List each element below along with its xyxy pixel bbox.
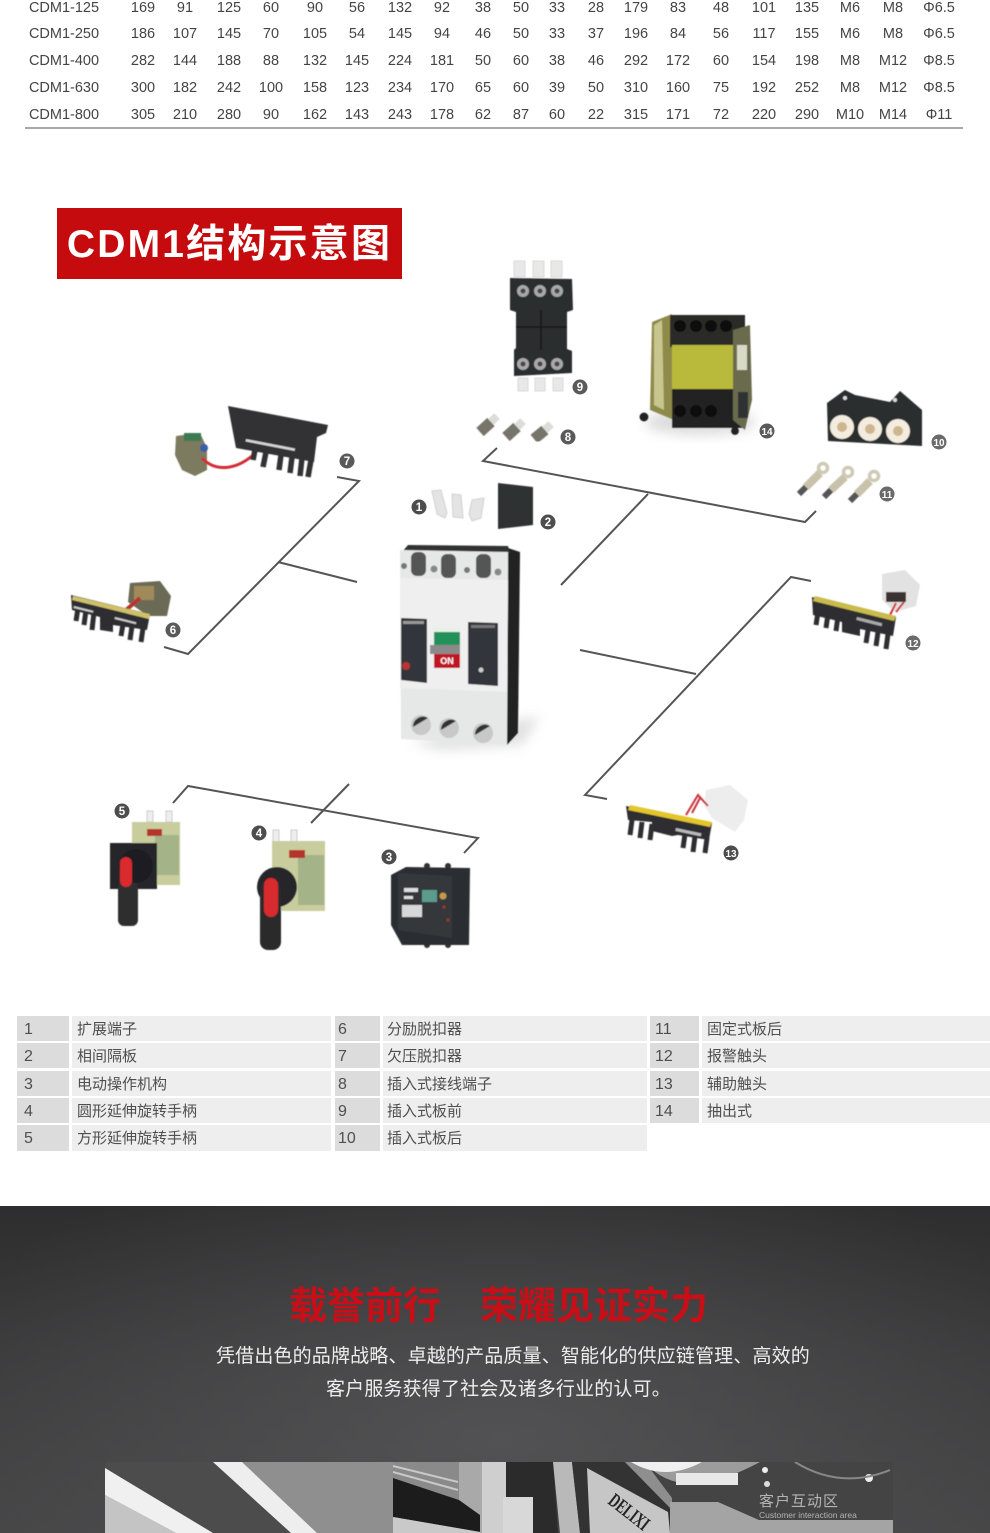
leader lines: left bracket	[164, 477, 359, 654]
row CDM1-630: M8	[840, 80, 860, 96]
row CDM1-630: 39	[549, 80, 565, 96]
parts legend table: 14	[655, 1103, 673, 1120]
product: main circuit breaker	[400, 545, 540, 750]
parts legend table: 插入式板前	[387, 1103, 462, 1120]
badge 7	[340, 454, 354, 468]
row CDM1-250: Φ6.5	[923, 26, 955, 42]
row CDM1-250: 107	[173, 26, 197, 42]
row CDM1-400: 60	[713, 53, 729, 69]
photo panel: customer interaction area	[503, 1462, 893, 1533]
row CDM1-400: 172	[666, 53, 690, 69]
row CDM1-400: 154	[752, 53, 776, 69]
product 2: phase barrier	[498, 483, 533, 529]
badge 6: 6	[170, 625, 176, 637]
row CDM1-630: 160	[666, 80, 690, 96]
dimension table	[25, 0, 963, 129]
row CDM1-630: 100	[259, 80, 283, 96]
badge 12	[906, 636, 920, 650]
row CDM1-630: CDM1-630	[29, 80, 99, 96]
row CDM1-800: 90	[263, 107, 279, 123]
row CDM1-400: 292	[624, 53, 648, 69]
row CDM1-125: 92	[434, 0, 450, 16]
row CDM1-125: 38	[475, 0, 491, 16]
section description: 客户服务获得了社会及诸多行业的认可。	[326, 1379, 671, 1400]
product 13: auxiliary contact	[626, 785, 748, 853]
row CDM1-125: 90	[307, 0, 323, 16]
badge 10	[932, 434, 946, 450]
row CDM1-250: 155	[795, 26, 819, 42]
parts legend table: 扩展端子	[77, 1021, 137, 1038]
parts legend table: 欠压脱扣器	[387, 1048, 462, 1065]
row CDM1-250: 145	[217, 26, 241, 42]
area sign english text: Customer interaction area	[759, 1510, 857, 1520]
row CDM1-800: 62	[475, 107, 491, 123]
row CDM1-400	[29, 53, 955, 69]
row CDM1-800: 290	[795, 107, 819, 123]
row CDM1-400: 144	[173, 53, 197, 69]
row CDM1-250	[29, 26, 955, 42]
parts legend table: 分励脱扣器	[387, 1021, 462, 1038]
row CDM1-400: 46	[588, 53, 604, 69]
badge 9	[572, 380, 588, 394]
row CDM1-630: 300	[131, 80, 155, 96]
badge 8	[560, 430, 576, 444]
badge 8: 8	[565, 432, 572, 444]
row CDM1-400: M8	[840, 53, 860, 69]
row CDM1-125: 169	[131, 0, 155, 16]
row CDM1-800: 162	[303, 107, 327, 123]
section title: 荣耀见证实力	[480, 1286, 708, 1328]
section title: 载誉前行	[289, 1286, 441, 1328]
badge 12: 12	[907, 639, 919, 650]
badge 7: 7	[344, 456, 350, 468]
row CDM1-250: 37	[588, 26, 604, 42]
parts legend table: 12	[655, 1048, 673, 1065]
row CDM1-630	[29, 80, 955, 96]
leader lines: bottom bracket	[173, 784, 478, 853]
row CDM1-630: M12	[879, 80, 907, 96]
parts legend table: 4	[24, 1103, 33, 1120]
row CDM1-400: M12	[879, 53, 907, 69]
row CDM1-800: 210	[173, 107, 197, 123]
area sign text: 客户互动区	[759, 1493, 839, 1510]
heading: CDM1 structure diagram	[57, 208, 402, 279]
row CDM1-800: 60	[549, 107, 565, 123]
row CDM1-400: 181	[430, 53, 454, 69]
row CDM1-800: 315	[624, 107, 648, 123]
row CDM1-400: 198	[795, 53, 819, 69]
row CDM1-630: Φ8.5	[923, 80, 955, 96]
row CDM1-125: 179	[624, 0, 648, 16]
row CDM1-400: 38	[549, 53, 565, 69]
row CDM1-400: 60	[513, 53, 529, 69]
badge 5: 5	[119, 806, 126, 818]
badge 14	[760, 424, 774, 438]
row CDM1-400: 132	[303, 53, 327, 69]
parts legend table: 插入式接线端子	[387, 1076, 492, 1093]
heading: CDM1 structure diagram: CDM1结构示意图	[67, 223, 392, 266]
row CDM1-400: 50	[475, 53, 491, 69]
parts legend table: 11	[655, 1021, 672, 1038]
leader lines: top bracket	[483, 448, 816, 585]
row CDM1-250: 84	[670, 26, 686, 42]
row CDM1-125: M8	[883, 0, 903, 16]
row CDM1-800	[29, 107, 952, 123]
row CDM1-250: M8	[883, 26, 903, 42]
row CDM1-125: 33	[549, 0, 565, 16]
parts legend table: 10	[338, 1130, 356, 1147]
row CDM1-250: M6	[840, 26, 860, 42]
section title	[289, 1286, 708, 1328]
row CDM1-800: CDM1-800	[29, 107, 99, 123]
parts legend table: 2	[24, 1048, 33, 1065]
parts legend table: 8	[338, 1076, 347, 1093]
row CDM1-125: M6	[840, 0, 860, 16]
badge 6	[166, 622, 180, 638]
product 11: fixed rear terminals	[799, 464, 878, 501]
row CDM1-250: 56	[713, 26, 729, 42]
row CDM1-800: 305	[131, 107, 155, 123]
row CDM1-250: 70	[263, 26, 279, 42]
parts legend table: 电动操作机构	[77, 1076, 167, 1093]
row CDM1-250: 46	[475, 26, 491, 42]
row CDM1-800: 280	[217, 107, 241, 123]
row CDM1-630: 50	[588, 80, 604, 96]
photo panel: architecture	[105, 1462, 393, 1533]
parts legend table: 5	[24, 1130, 33, 1147]
row CDM1-125	[29, 0, 955, 16]
row CDM1-125: 60	[263, 0, 279, 16]
row CDM1-125: 83	[670, 0, 686, 16]
section description	[216, 1346, 810, 1400]
row CDM1-250: 186	[131, 26, 155, 42]
parts legend table: 插入式板后	[387, 1130, 462, 1147]
row CDM1-125: 56	[349, 0, 365, 16]
row CDM1-800: M14	[879, 107, 907, 123]
row CDM1-125: Φ6.5	[923, 0, 955, 16]
row CDM1-630: 158	[303, 80, 327, 96]
product 14: draw-out mechanism	[640, 314, 755, 435]
row CDM1-400: 224	[388, 53, 412, 69]
row CDM1-800: 243	[388, 107, 412, 123]
row CDM1-630: 192	[752, 80, 776, 96]
row CDM1-125: 28	[588, 0, 604, 16]
product 8: plug-in terminals	[480, 416, 551, 439]
parts legend table: 固定式板后	[707, 1021, 782, 1038]
row CDM1-400: 145	[345, 53, 369, 69]
parts legend table: 圆形延伸旋转手柄	[77, 1103, 197, 1120]
parts legend table: 报警触头	[707, 1048, 767, 1065]
row CDM1-800: 178	[430, 107, 454, 123]
row CDM1-630: 75	[713, 80, 729, 96]
row CDM1-630: 65	[475, 80, 491, 96]
product 9: plug-in front plate	[510, 261, 573, 391]
product 4: round extended rotary handle	[257, 830, 325, 950]
row CDM1-250: 117	[752, 26, 776, 42]
row CDM1-250: 105	[303, 26, 327, 42]
badge 11	[880, 486, 894, 502]
row CDM1-800: 171	[666, 107, 690, 123]
row CDM1-250: 33	[549, 26, 565, 42]
dark honors section background	[0, 1206, 990, 1533]
parts legend table: 1	[24, 1021, 33, 1038]
row CDM1-630: 60	[513, 80, 529, 96]
row CDM1-630: 234	[388, 80, 412, 96]
badge 11: 11	[882, 490, 893, 501]
badge 1	[412, 500, 426, 514]
row CDM1-125: 50	[513, 0, 529, 16]
row CDM1-250: CDM1-250	[29, 26, 99, 42]
photo panel: building facade	[393, 1462, 506, 1533]
row CDM1-630: 310	[624, 80, 648, 96]
product 5: square extended rotary handle	[110, 811, 180, 926]
row CDM1-400: 282	[131, 53, 155, 69]
badge 14: 14	[761, 427, 773, 438]
badge 13: 13	[725, 849, 737, 860]
row CDM1-125: CDM1-125	[29, 0, 99, 16]
product 6: shunt release	[71, 581, 171, 642]
parts legend table: 方形延伸旋转手柄	[77, 1130, 197, 1147]
row CDM1-125: 132	[388, 0, 412, 16]
parts legend table: 9	[338, 1103, 347, 1120]
grayscale photo strip	[105, 1462, 893, 1533]
row CDM1-630: 182	[173, 80, 197, 96]
badge 5	[114, 804, 130, 818]
badge 9: 9	[577, 382, 583, 394]
row CDM1-125: 125	[217, 0, 241, 16]
badge 10: 10	[933, 438, 945, 449]
row CDM1-250: 54	[349, 26, 365, 42]
row CDM1-630: 252	[795, 80, 819, 96]
parts legend table: 7	[338, 1048, 347, 1065]
row CDM1-800: 87	[513, 107, 529, 123]
badge 4: 4	[256, 828, 263, 840]
badge 2	[540, 514, 556, 530]
parts legend table	[17, 1016, 990, 1151]
product 3: motor operator	[391, 863, 470, 948]
product 7: undervoltage release	[175, 406, 328, 477]
row CDM1-125: 101	[752, 0, 776, 16]
parts legend table: 3	[24, 1076, 33, 1093]
row CDM1-630: 170	[430, 80, 454, 96]
row CDM1-400: Φ8.5	[923, 53, 955, 69]
parts legend table: 13	[655, 1076, 673, 1093]
badge 4	[252, 826, 266, 840]
product 10: plug-in rear plate	[827, 390, 922, 446]
parts legend table: 6	[338, 1021, 347, 1038]
row CDM1-800: 220	[752, 107, 776, 123]
badge 2: 2	[545, 517, 551, 529]
row CDM1-800: Φ11	[926, 107, 952, 123]
row CDM1-125: 135	[795, 0, 819, 16]
exploded structure diagram	[70, 260, 946, 951]
leader lines: right bracket	[580, 577, 811, 799]
row CDM1-125: 48	[713, 0, 729, 16]
section description: 凭借出色的品牌战略、卓越的产品质量、智能化的供应链管理、高效的	[216, 1346, 810, 1367]
parts legend table: 抽出式	[707, 1103, 752, 1120]
row CDM1-250: 145	[388, 26, 412, 42]
badge 13	[724, 846, 738, 860]
row CDM1-800: 143	[345, 107, 369, 123]
row CDM1-800: 72	[713, 107, 729, 123]
number badges	[114, 380, 946, 864]
row CDM1-800: 22	[588, 107, 604, 123]
row CDM1-800: M10	[836, 107, 864, 123]
row CDM1-125: 91	[177, 0, 193, 16]
parts legend table: 相间隔板	[77, 1048, 137, 1065]
product 12: alarm contact	[812, 570, 920, 649]
row CDM1-250: 94	[434, 26, 450, 42]
badge 3: 3	[386, 852, 392, 864]
row CDM1-400: CDM1-400	[29, 53, 99, 69]
row CDM1-400: 88	[263, 53, 279, 69]
product: main circuit breaker: ON	[440, 656, 454, 666]
row CDM1-250: 50	[513, 26, 529, 42]
product 1: extension terminals	[432, 490, 484, 521]
row CDM1-630: 123	[345, 80, 369, 96]
row CDM1-400: 188	[217, 53, 241, 69]
badge 3	[382, 850, 396, 864]
row CDM1-250: 196	[624, 26, 648, 42]
parts legend table: 辅助触头	[707, 1076, 767, 1093]
badge 1: 1	[416, 502, 423, 514]
row CDM1-630: 242	[217, 80, 241, 96]
